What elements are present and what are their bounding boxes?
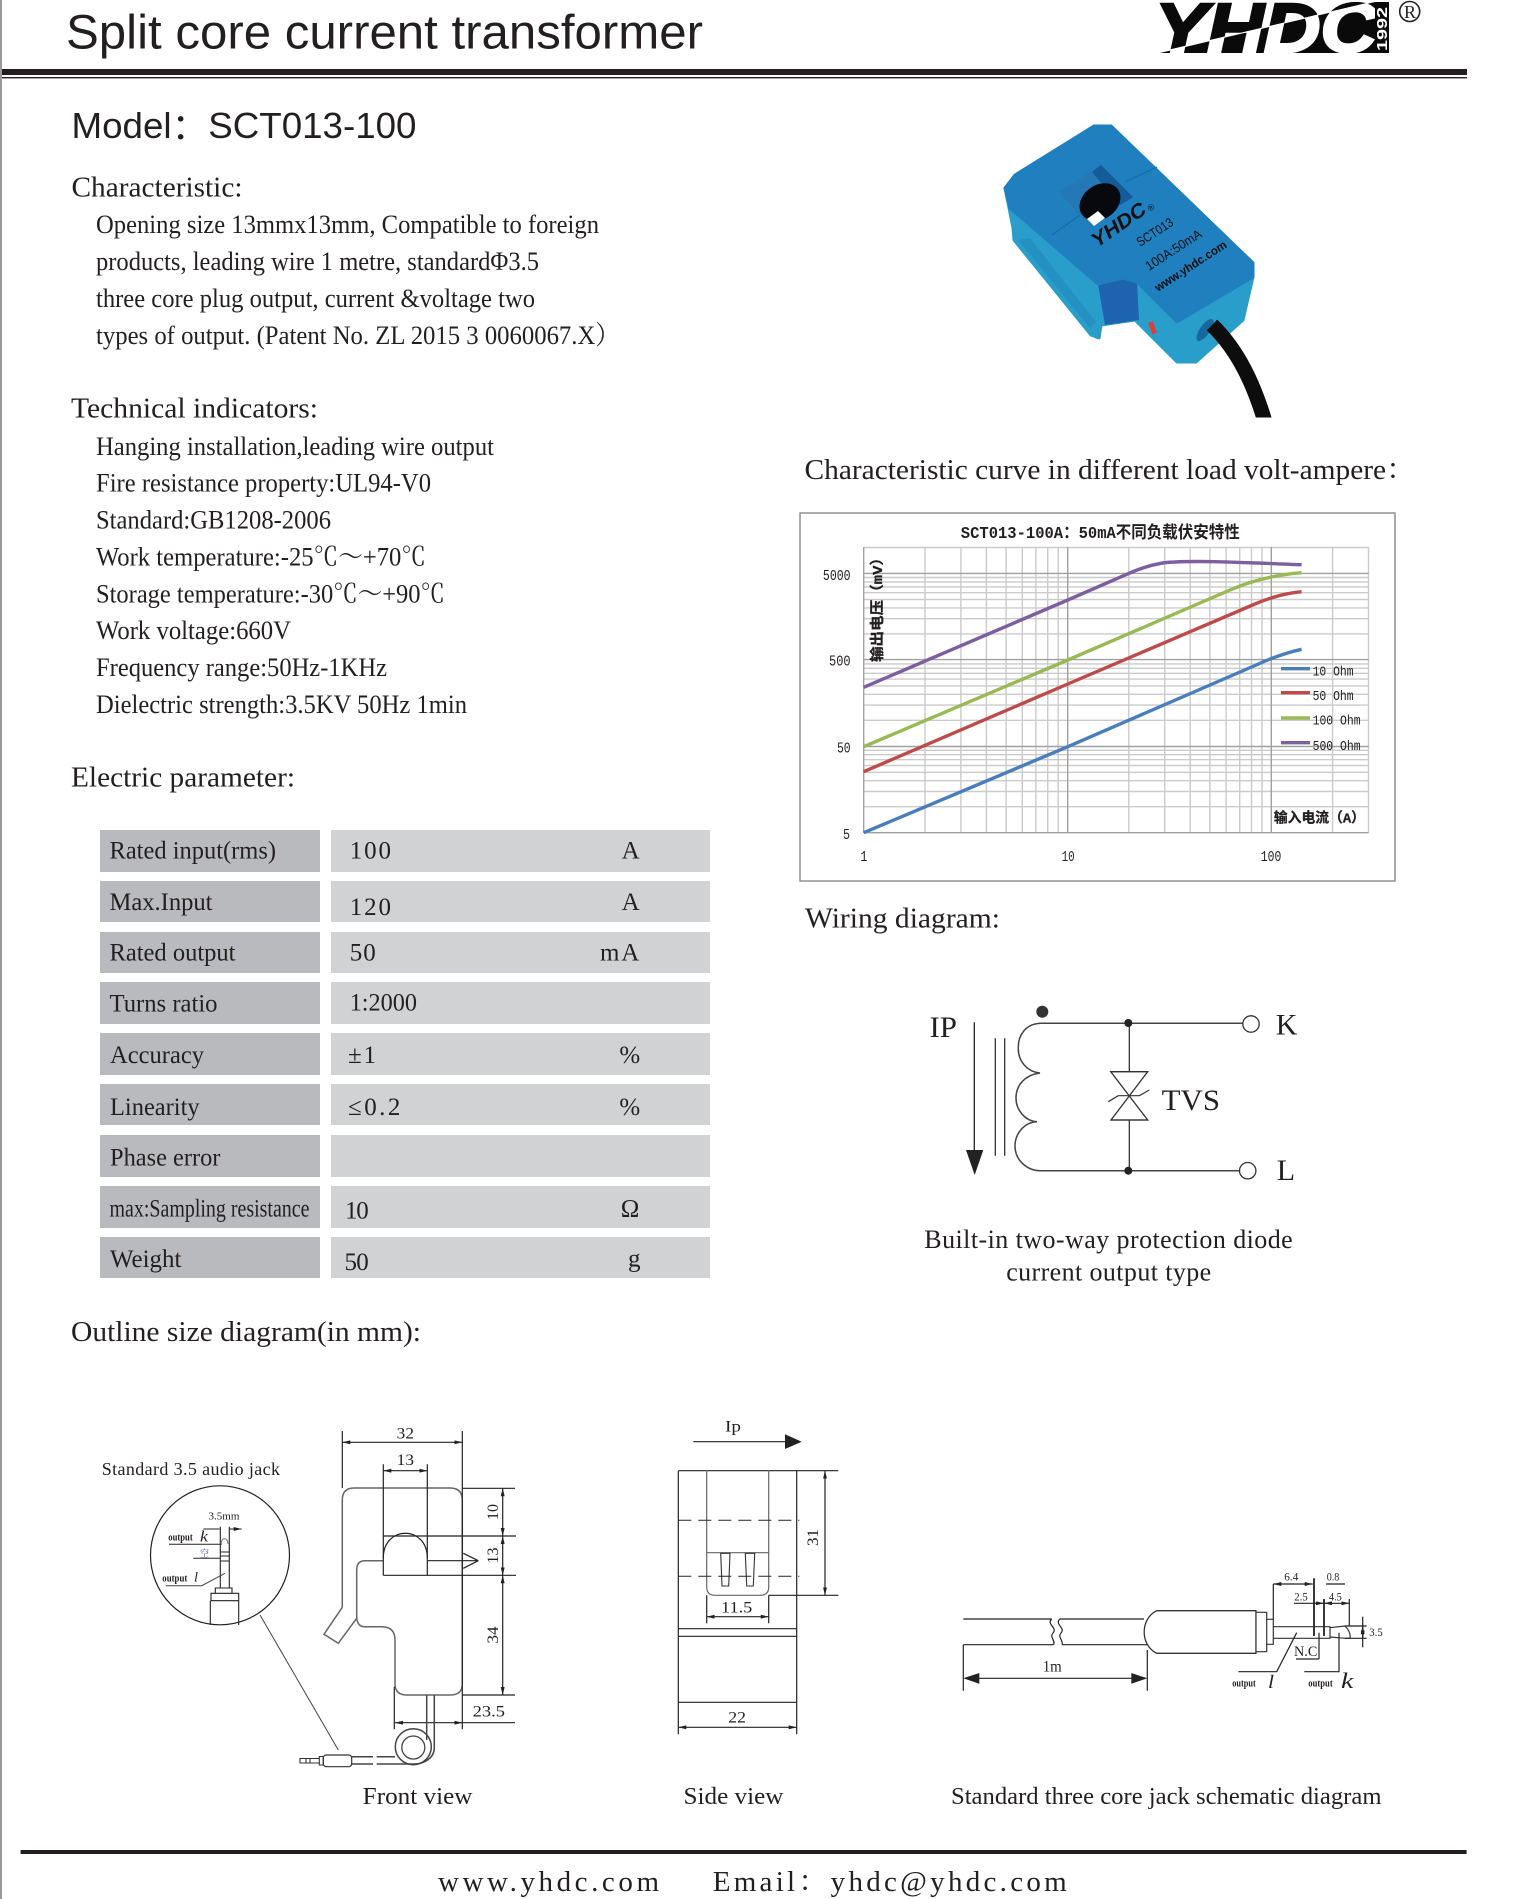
- table: electric parameters: Rated input(rms): [110, 838, 276, 865]
- heading: characteristic curve: Characteristic curve in different load volt-ampere：: [804, 454, 1416, 486]
- text block: characteristic: Characteristic:: [72, 172, 243, 204]
- diagram: standard three core jack schematic: 1m: [1043, 1659, 1062, 1676]
- diagram: front view: 32: [397, 1426, 414, 1442]
- x axis labels: 1: [860, 850, 867, 866]
- wiring caption: current output type: [1006, 1258, 1211, 1286]
- y axis labels: 输出电压（mV）: [869, 550, 887, 662]
- wiring diagram: transformer with TVS: [930, 1006, 1298, 1187]
- caption: jack schematic: Standard three core jack schematic diagram: [951, 1784, 1382, 1810]
- caption: front view: Front view: [363, 1784, 473, 1810]
- product photo: blue split core transformer: YHDC: [1087, 198, 1151, 252]
- diagram: standard 3.5 audio jack detail: l: [194, 1571, 198, 1586]
- footer contact: www.yhdc.com: [438, 1866, 659, 1898]
- table: electric parameters: A: [622, 889, 640, 916]
- product photo: blue split core transformer: SCT013: [1133, 215, 1176, 250]
- table: electric parameters: Ω: [621, 1196, 639, 1223]
- text block: characteristic: [72, 172, 620, 350]
- text block: technical indicators: [71, 393, 495, 719]
- text block: technical indicators: Work temperature:-25℃～+70℃: [96, 543, 426, 572]
- table: electric parameters: 1:2000: [350, 990, 417, 1017]
- table: electric parameters: [100, 830, 710, 1278]
- wiring diagram: transformer with TVS: TVS: [1162, 1084, 1220, 1117]
- text block: characteristic: three core plug output, current &voltage two: [96, 284, 535, 313]
- diagram: front view: 13: [397, 1452, 414, 1469]
- diagram: standard three core jack schematic: 0.8: [1327, 1570, 1339, 1584]
- product photo: blue split core transformer: [1005, 126, 1290, 438]
- diagram: front view: 10: [485, 1504, 502, 1520]
- diagram: standard 3.5 audio jack detail: [102, 1459, 338, 1750]
- diagram: front view: [300, 1426, 516, 1767]
- text block: characteristic: products, leading wire 1 metre, standardΦ3.5: [96, 247, 539, 276]
- diagram: standard three core jack schematic: 4.5: [1329, 1590, 1342, 1604]
- logo: YHDC 1992: R: [1404, 2, 1416, 22]
- text block: technical indicators: Fire resistance property:UL94-V0: [96, 469, 431, 498]
- diagram: standard 3.5 audio jack detail: 空: [200, 1547, 209, 1560]
- text block: technical indicators: Technical indicators:: [71, 393, 318, 425]
- text block: technical indicators: Hanging installation,leading wire output: [96, 432, 495, 461]
- text block: technical indicators: Storage temperature:-30℃～+90℃: [96, 580, 445, 609]
- table: electric parameters: A: [622, 838, 640, 865]
- curve: 50 Ohm: [864, 592, 1302, 772]
- diagram: side view: [678, 1419, 838, 1734]
- x axis labels: 输入电流（A）: [1274, 810, 1365, 828]
- footer contact: [438, 1866, 1067, 1898]
- legend: 100 Ohm: [1313, 713, 1361, 729]
- diagram: standard three core jack schematic: 2.5: [1294, 1590, 1308, 1604]
- x axis labels: [860, 810, 1365, 866]
- legend: 10 Ohm: [1313, 664, 1354, 680]
- heading: electric parameter: Electric parameter:: [71, 762, 295, 794]
- text block: technical indicators: Work voltage:660V: [96, 616, 291, 645]
- chart title: SCT013-100A：50mA不同负载伏安特性: [961, 522, 1240, 544]
- table: electric parameters: 100: [350, 838, 391, 865]
- text block: technical indicators: Standard:GB1208-2006: [96, 505, 331, 534]
- diagram: side view: Ip: [725, 1419, 741, 1436]
- legend: [1281, 664, 1361, 755]
- header rule: [2, 69, 1467, 78]
- wiring diagram: transformer with TVS: IP: [930, 1011, 957, 1044]
- x axis labels: 100: [1261, 850, 1281, 866]
- legend: 50 Ohm: [1313, 689, 1354, 705]
- diagram: standard three core jack schematic: output: [1308, 1679, 1333, 1690]
- diagram: front view: 34: [485, 1626, 502, 1644]
- y axis labels: 5: [843, 828, 850, 844]
- table: electric parameters: Accuracy: [110, 1042, 204, 1069]
- table: electric parameters: 50: [350, 940, 376, 967]
- table: electric parameters: 50: [344, 1249, 369, 1276]
- diagram: standard three core jack schematic: 6.4: [1284, 1570, 1298, 1584]
- diagram: standard three core jack schematic: 3.5: [1369, 1625, 1383, 1639]
- text block: characteristic: types of output. (Patent No. ZL 2015 3 0060067.X）: [96, 321, 620, 350]
- product photo: blue split core transformer: www.yhdc.com: [1151, 238, 1229, 295]
- curve: 500 Ohm: [864, 561, 1302, 687]
- diagram: standard 3.5 audio jack detail: Standard 3.5 audio jack: [102, 1459, 280, 1479]
- table: electric parameters: Max.Input: [110, 889, 213, 916]
- logo: YHDC 1992: 1992: [1374, 7, 1391, 51]
- table: electric parameters: 120: [350, 894, 391, 921]
- diagram: standard three core jack schematic: k: [1341, 1668, 1355, 1693]
- table: electric parameters: ≤0.2: [348, 1094, 400, 1121]
- diagram: standard 3.5 audio jack detail: k: [200, 1529, 209, 1546]
- heading: wiring diagram: Wiring diagram:: [805, 902, 1000, 934]
- diagram: side view: 22: [728, 1710, 746, 1727]
- chart: load volt-ampere curves: [800, 513, 1395, 881]
- table: electric parameters: 10: [345, 1197, 369, 1224]
- logo: YHDC 1992: [1160, 0, 1420, 53]
- title: Split core current transformer: [66, 6, 703, 60]
- product photo: blue split core transformer: 100A:50mA: [1142, 226, 1205, 274]
- table: electric parameters: Phase error: [110, 1145, 221, 1172]
- wiring diagram: transformer with TVS: K: [1276, 1008, 1298, 1041]
- diagram: side view: 31: [805, 1529, 822, 1546]
- diagram: standard 3.5 audio jack detail: output: [162, 1574, 188, 1585]
- table: electric parameters: Turns ratio: [110, 991, 218, 1018]
- table: electric parameters: Linearity: [110, 1094, 200, 1121]
- product photo: blue split core transformer: ®: [1145, 201, 1157, 214]
- table: electric parameters: %: [619, 1042, 640, 1069]
- diagram: standard three core jack schematic: l: [1268, 1672, 1274, 1693]
- model heading: SCT013-100: [208, 105, 416, 146]
- heading: outline size: Outline size diagram(in mm):: [71, 1316, 421, 1348]
- table: electric parameters: g: [628, 1246, 641, 1273]
- y axis labels: 500: [829, 655, 851, 671]
- wiring caption: Built-in two-way protection diode: [924, 1225, 1293, 1254]
- y axis labels: 50: [837, 742, 851, 758]
- wiring caption: [924, 1225, 1293, 1286]
- diagram: standard 3.5 audio jack detail: output: [168, 1533, 193, 1544]
- table: electric parameters: Weight: [110, 1246, 181, 1273]
- y axis labels: [823, 550, 887, 844]
- model heading: ：: [172, 106, 208, 147]
- y axis labels: 5000: [823, 569, 851, 585]
- table: electric parameters: %: [619, 1094, 640, 1121]
- text block: characteristic: Opening size 13mmx13mm, Compatible to foreign: [96, 210, 599, 239]
- table: electric parameters: max:Sampling resistance: [110, 1196, 310, 1223]
- x axis labels: 10: [1062, 850, 1075, 866]
- wiring diagram: transformer with TVS: L: [1277, 1154, 1295, 1187]
- footer contact: Email：yhdc@yhdc.com: [713, 1866, 1067, 1898]
- diagram: standard 3.5 audio jack detail: 3.5mm: [208, 1510, 240, 1522]
- curve: 10 Ohm: [864, 649, 1302, 833]
- diagram: standard three core jack schematic: [963, 1570, 1383, 1693]
- diagram: front view: 23.5: [473, 1704, 505, 1721]
- legend: 500 Ohm: [1313, 739, 1361, 755]
- curve: 100 Ohm: [864, 573, 1302, 747]
- table: electric parameters: ±1: [348, 1042, 376, 1069]
- table: electric parameters: Rated output: [110, 940, 236, 967]
- table: electric parameters: mA: [600, 940, 639, 967]
- caption: side view: Side view: [684, 1784, 784, 1810]
- diagram: standard three core jack schematic: N.C: [1294, 1644, 1317, 1660]
- diagram: side view: 11.5: [721, 1600, 752, 1617]
- footer rule: [21, 1850, 1467, 1854]
- model heading: Model: [72, 105, 170, 146]
- text block: technical indicators: Dielectric strength:3.5KV 50Hz 1min: [96, 690, 467, 719]
- text block: technical indicators: Frequency range:50Hz-1KHz: [96, 653, 387, 682]
- diagram: front view: 13: [485, 1548, 502, 1564]
- diagram: standard three core jack schematic: output: [1232, 1679, 1256, 1690]
